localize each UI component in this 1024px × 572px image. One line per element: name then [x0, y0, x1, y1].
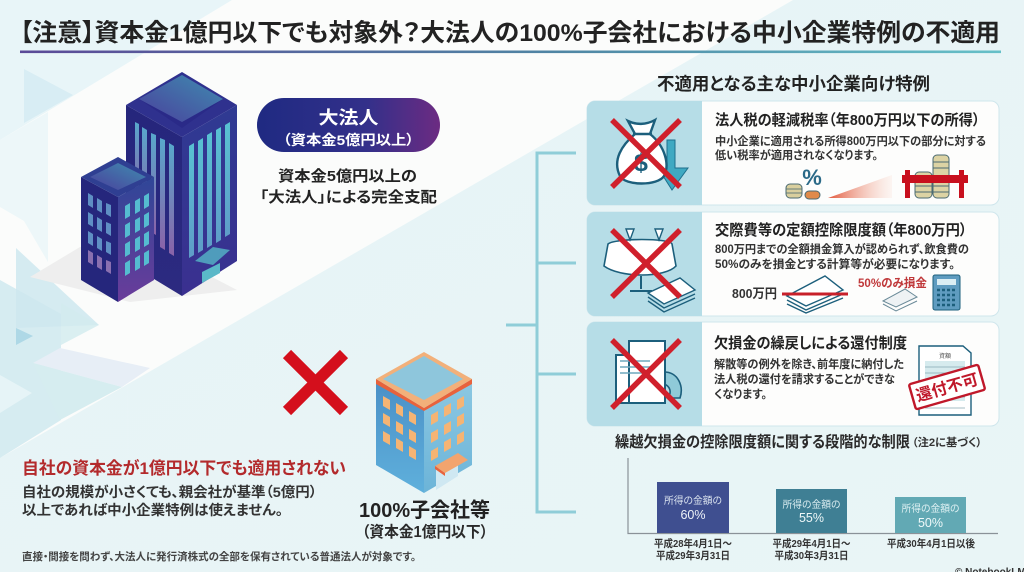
title: 【注意】資本金1億円以下でも対象外？大法人の100%子会社における中小企業特例の不適用: [20, 19, 1000, 47]
icon: coins, percent and rate wedge: [786, 165, 892, 199]
panel: refund by loss carryback: [587, 322, 999, 426]
icon: statement with refund-denied stamp: 資額: [939, 352, 951, 360]
callout: not applicable even at 100M yen or less: [22, 458, 346, 518]
label: subsidiary: 100%子会社等: [359, 499, 490, 522]
footnote: 直接・間接を問わず、大法人に発行済株式の全部を保有されている普通法人が対象です。: [22, 550, 416, 563]
connector bracket: [506, 153, 576, 512]
heading: phased limits on loss carryforward: 繰越欠損金の控除限度額に関する段階的な制限: [615, 432, 910, 451]
bar: 55%: 所得の金額の: [782, 498, 841, 511]
text: large corporation description: [260, 167, 437, 206]
text: carryback title and body: 解散等の例外を除き、前年度に納付した: [714, 357, 904, 371]
icon: dining table: [604, 229, 695, 312]
bar chart: deduction limit by period: [628, 458, 998, 562]
text: reduced tax title and body: 低い税率が適用されなくなります。: [715, 148, 878, 162]
icon: 50% deductible cash and calculator: 50%のみ損金: [858, 275, 927, 290]
text: entertainment title and body: 800万円までの全額損金算入が認められず、飲食費の: [715, 242, 969, 256]
text: carryback title and body: [714, 334, 907, 401]
icon: statement with refund-denied stamp: [909, 346, 985, 415]
icon: refund document: [612, 340, 681, 408]
axis labels: periods: 平成30年3月31日: [774, 549, 848, 562]
icon: 800万円 struck through cash: 800万円: [732, 286, 777, 301]
bar: 60%: 60%: [680, 508, 706, 522]
icon: money bag with down arrow: $: [634, 149, 648, 177]
text: reduced tax title and body: [715, 111, 986, 162]
bar: 60%: 所得の金額の: [664, 494, 722, 507]
axis labels: periods: 平成29年4月1日～: [772, 537, 851, 550]
callout: not applicable even at 100M yen or less: 自社の規模が小さくても、親会社が基準（5億円）: [22, 484, 317, 500]
text: reduced tax title and body: 法人税の軽減税率（年800万円以下の所得）: [715, 111, 980, 129]
text: carryback title and body: くなります。: [714, 388, 767, 401]
bar: 55%: [776, 489, 847, 533]
text: carryback title and body: 法人税の還付を請求することができな: [714, 372, 895, 386]
icon: large corporation building: [30, 72, 237, 302]
label: subsidiary: [359, 499, 490, 541]
panel: reduced corporate tax rate: [587, 101, 999, 205]
axis labels: periods: [654, 537, 975, 562]
axis labels: periods: 平成28年4月1日～: [654, 537, 732, 550]
icon: subsidiary building: [376, 352, 472, 493]
icon: money bag with down arrow: [612, 120, 688, 190]
icon: coins, percent and rate wedge: %: [802, 165, 822, 190]
label pill: large corporation: （資本金5億円以上）: [283, 132, 414, 148]
bar: 60%: [657, 482, 729, 533]
callout: not applicable even at 100M yen or less: 自社の資本金が1億円以下でも適用されない: [22, 458, 346, 478]
text: entertainment title and body: [715, 221, 969, 271]
icon: coin stacks blocked by red gate: [902, 155, 968, 198]
text: entertainment title and body: 50%のみを損金とする計算等が必要になります。: [715, 257, 955, 271]
bar: 55%: 55%: [799, 511, 824, 525]
callout: not applicable even at 100M yen or less: 以上であれば中小企業特例は使えません。: [22, 502, 283, 518]
text: large corporation description: 「大法人」による完全支配: [260, 188, 437, 206]
bar: 50%: 所得の金額の: [902, 502, 960, 515]
heading: phased limits on loss carryforward: （注2に基づく）: [912, 435, 982, 449]
bar: 50%: 50%: [918, 516, 943, 530]
axis labels: periods: 平成29年3月31日: [656, 549, 730, 562]
panel: entertainment expense deduction: [587, 212, 999, 316]
label pill: large corporation: 大法人: [318, 108, 378, 128]
heading: main SME special provisions: 不適用となる主な中小企業向け特例: [657, 74, 930, 94]
icon: 800万円 struck through cash: [732, 276, 848, 313]
text: reduced tax title and body: 中小企業に適用される所得800万円以下の部分に対する: [715, 134, 986, 148]
axis labels: periods: 平成30年4月1日以後: [887, 537, 975, 550]
icon: statement with refund-denied stamp: 還付不可: [914, 370, 981, 405]
icon: red cross: [287, 354, 344, 411]
label pill: large corporation: [257, 98, 440, 152]
label: subsidiary: （資本金1億円以下）: [362, 522, 488, 541]
text: entertainment title and body: 交際費等の定額控除限度額（年800万円）: [715, 221, 967, 239]
icon: 50% deductible cash and calculator: [858, 275, 960, 311]
text: large corporation description: 資本金5億円以上の: [278, 167, 417, 185]
bar: 50%: [895, 497, 966, 533]
text: carryback title and body: 欠損金の繰戻しによる還付制度: [714, 334, 907, 352]
